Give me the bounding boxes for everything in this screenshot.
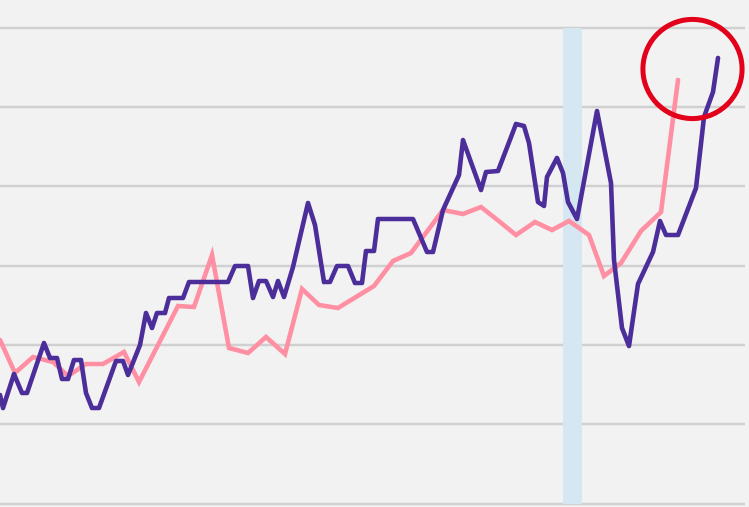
purple data line (0, 58, 718, 408)
pink data line (0, 80, 678, 382)
red highlight circle (643, 19, 742, 119)
highlighted vertical band (563, 28, 582, 504)
